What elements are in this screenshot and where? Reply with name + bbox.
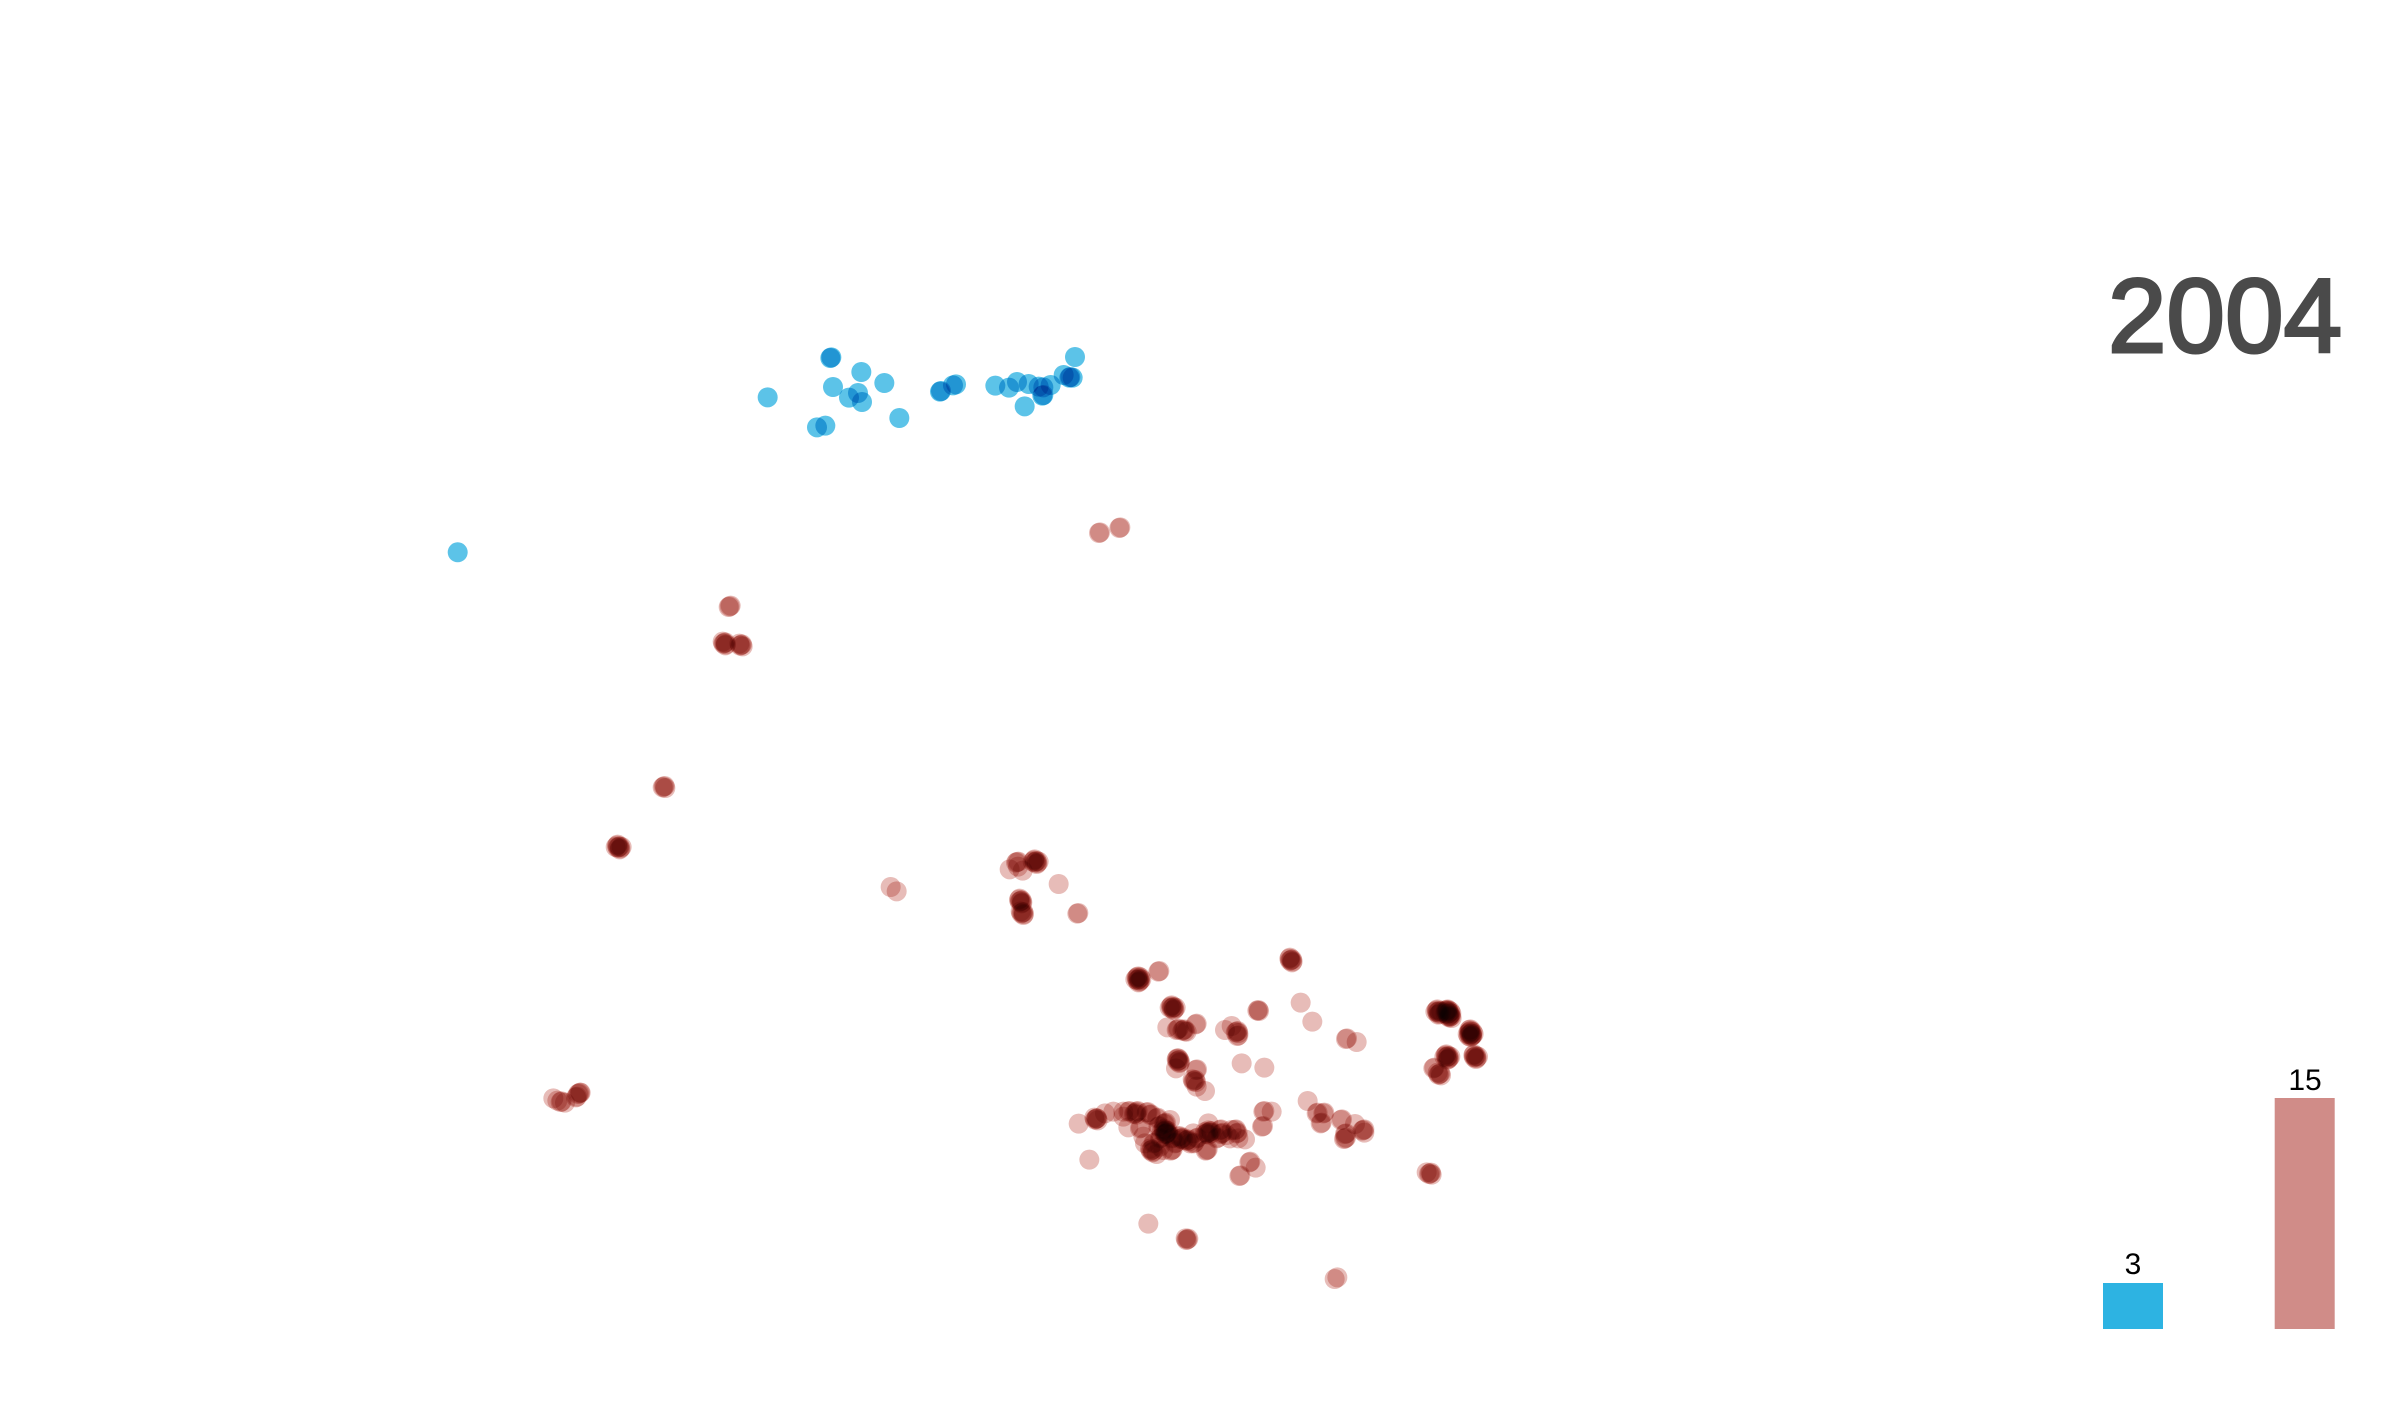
blue dot cluster bbox=[758, 347, 1085, 437]
bar: red count bbox=[2275, 1064, 2335, 1329]
red dots west column bbox=[606, 596, 753, 859]
bar: blue count bbox=[2103, 1248, 2163, 1329]
red dots main south-east field bbox=[1069, 948, 1488, 1289]
red dots north pair bbox=[1089, 517, 1130, 543]
bar: red count: 15 bbox=[2288, 1064, 2322, 1097]
red dots central group bbox=[881, 849, 1088, 925]
isolated blue dot bbox=[448, 542, 468, 562]
bar: blue count: 3 bbox=[2125, 1248, 2141, 1281]
year label: 2004 bbox=[2108, 258, 2342, 375]
red dots south-west group bbox=[543, 1083, 591, 1113]
